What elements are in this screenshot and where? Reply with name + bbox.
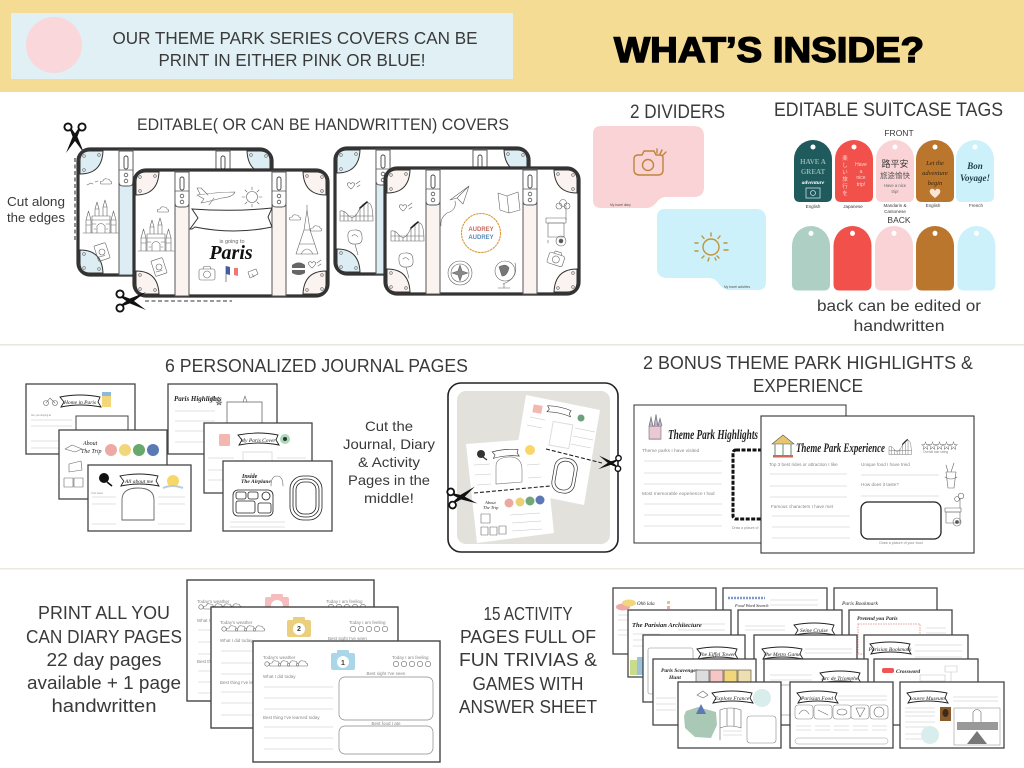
middle cut instruction text: Pages in the (348, 472, 430, 488)
diary page: day 1: What I did today (263, 674, 296, 679)
diary page: day 1: Best sight I've seen (367, 671, 406, 676)
icon: scissors top (64, 123, 86, 153)
title: WHAT’S INSIDE? (614, 31, 924, 70)
journal page: my paris cover: My Paris Cover (239, 438, 276, 444)
illustration: castle (138, 218, 174, 251)
tag language labels: English (926, 203, 941, 208)
tag: japanese: い (842, 169, 848, 176)
divider pink (593, 126, 704, 208)
heading: covers: EDITABLE( OR CAN BE HANDWRITTEN) COVERS (137, 115, 509, 134)
journal page: about the trip (59, 430, 167, 499)
cut instruction text: Cut along (7, 194, 65, 209)
middle cut instruction text: middle! (364, 490, 414, 506)
illustration: globe (495, 261, 516, 288)
journal page: about the trip: The Trip (81, 449, 102, 455)
tags note: handwritten (854, 318, 944, 335)
panel: journal pages (26, 356, 621, 552)
heading: diary: PRINT ALL YOU (38, 603, 170, 623)
tag: japanese: trip! (857, 182, 865, 188)
activity pages row 2: Seine Cruise (800, 628, 829, 634)
illustration: sun (242, 187, 262, 207)
middle cut instruction text: Cut the (365, 418, 413, 434)
tag: chinese: trip! (892, 189, 898, 194)
front cover two (385, 168, 579, 294)
tag: japanese: し (842, 162, 848, 169)
diary page: day 1: Best thing I've learned today (263, 715, 320, 720)
journal page: about the trip: About (82, 441, 98, 447)
activity pages row 4: Crossword (896, 669, 920, 675)
header band (0, 0, 1024, 92)
divider blue (657, 209, 766, 290)
diary page: day 3 (187, 580, 374, 701)
diary page: day 1 (253, 641, 440, 762)
journal page: my paris cover (204, 423, 312, 493)
sheet: front: The Trip (483, 505, 499, 510)
journal page: all about me (88, 465, 191, 531)
journal page: home in paris (26, 384, 135, 454)
divider blue: My travel activities (724, 285, 750, 289)
divider pink: My travel diary (610, 203, 631, 207)
heading: activity: GAMES WITH (472, 674, 584, 694)
cut instruction text (7, 194, 66, 225)
tag backs (792, 226, 996, 290)
diary page: day 2: Best sight I've seen (328, 636, 367, 641)
icon: scissors bottom (116, 290, 146, 312)
logo (462, 214, 500, 252)
activity pages row 2: Pretend you Paris (857, 616, 898, 622)
tag: japanese: Have (855, 162, 867, 168)
panel: diary pages (26, 580, 440, 762)
activity pages row 1: Ohh lala (637, 602, 655, 607)
illustration: drink (945, 463, 957, 488)
illustration: paper plane (441, 186, 469, 226)
heading: diary: handwritten (52, 696, 156, 716)
tag language labels: English (806, 204, 821, 209)
page: theme park highlights (634, 405, 846, 543)
illustration: eiffel tower (296, 205, 318, 254)
icon: day camera (331, 650, 355, 670)
icon: pink colour swatch (26, 17, 82, 73)
callout text (112, 28, 478, 70)
tag: bon voyage: Voyage! (960, 173, 990, 183)
activity page: louvre museum (900, 682, 1004, 748)
cut line on photo left (474, 486, 550, 493)
illustration: macaron (292, 262, 305, 275)
heading: activity: PAGES FULL OF (460, 627, 596, 647)
diary page: day 2: Best thing I've learned today (220, 680, 277, 685)
page: theme park experience: How does it taste? (861, 482, 899, 487)
airplane window (290, 476, 322, 520)
diary page: day 2: Today's weather (220, 620, 253, 625)
diary page: day 3: Best thing (197, 659, 218, 664)
panel: covers (7, 115, 579, 312)
page: theme park experience: Famous characters I have met (771, 504, 834, 509)
activity pages row 2 (628, 610, 952, 677)
tag: let the adventure begin: begin (928, 180, 942, 187)
tag: chinese (876, 140, 914, 202)
tag: chinese: Have a nice (884, 183, 907, 188)
heading: diary (26, 603, 182, 716)
heading: tags: EDITABLE SUITCASE TAGS (774, 100, 1003, 121)
sheet: back (510, 395, 600, 505)
illustration: plane (197, 188, 235, 205)
illustration: cart (546, 200, 570, 246)
illustration: pink castle (649, 414, 662, 439)
activity page: louvre museum: Louvre Museum (908, 696, 945, 702)
diary page: day 3: Today's weather (197, 599, 230, 604)
back cover one (78, 149, 272, 275)
tag: bon voyage: Bon (966, 161, 983, 171)
tag: bon voyage (956, 140, 994, 202)
page: theme park highlights: Most memorable experience I had (642, 491, 715, 497)
page: theme park highlights: Draw a picture of (732, 526, 758, 530)
activity pages row 1: Paris Bookmark (841, 601, 878, 607)
activity pages row 4 (653, 659, 978, 725)
logo: AUDREY (468, 227, 494, 233)
icon: day camera: 1 (341, 660, 345, 667)
diary page: day 3: What I did today (197, 618, 230, 623)
activity pages row 5 (678, 682, 1004, 748)
illustration: carousel (772, 435, 794, 458)
tag: let the adventure begin (916, 140, 954, 202)
label: back: BACK (887, 215, 911, 225)
journal page: home in paris: Are you staying at (31, 414, 51, 417)
sheet: front: About (484, 500, 496, 505)
diary page: day 1: Best food I ate (371, 721, 401, 726)
middle cut instruction text (343, 418, 435, 506)
tag: have a great adventure (794, 140, 832, 202)
middle cut instruction text: & Activity (358, 454, 420, 470)
illustration: food cart (945, 493, 964, 526)
activity pages row 4: Arc de Triomphe (821, 676, 859, 682)
diary page: day 2 (211, 607, 398, 728)
activity page: explore france: Explore France (714, 696, 750, 702)
tag: japanese (835, 140, 873, 202)
page: theme park highlights: Theme Park Highlights (668, 428, 758, 443)
activity pages row 3 (643, 635, 968, 702)
horizontal cut line (145, 300, 232, 302)
sheet: front (466, 438, 554, 543)
heading: bonus: 2 BONUS THEME PARK HIGHLIGHTS & (643, 353, 973, 373)
activity pages row 4: Hunt (668, 675, 681, 681)
diary page: day 1: Today I am feeling (392, 655, 429, 660)
page: theme park experience (761, 416, 974, 553)
scalloped photo frame (733, 450, 773, 519)
tag: japanese: nice (856, 175, 866, 181)
heading: dividers: 2 DIVIDERS (630, 102, 725, 123)
tag: chinese: 路平安 (881, 158, 909, 169)
icon: camera (634, 149, 666, 175)
journal page: paris highlights: Paris Highlights (174, 395, 222, 403)
diary page: day 2: 2 (297, 626, 301, 633)
activity pages row 2: The Parisian Architecture (632, 622, 702, 629)
tag: japanese: を (842, 190, 848, 197)
tag language labels (806, 203, 983, 214)
photo: cutting example (447, 383, 621, 552)
icon: french flag (226, 266, 238, 282)
diary page: day 2: What I did today (220, 638, 253, 643)
activity pages row 3: The Eiffel Tower (699, 651, 736, 658)
heading: journal: 6 PERSONALIZED JOURNAL PAGES (165, 356, 468, 376)
front cover one (134, 170, 328, 296)
heading: activity: FUN TRIVIAS & (459, 650, 597, 670)
star rating: ☆☆☆☆☆ (921, 441, 958, 451)
airplane tray (233, 490, 273, 516)
banner (190, 208, 272, 231)
page: theme park experience: Unique food I have tried (861, 462, 910, 467)
callout text: OUR THEME PARK SERIES COVERS CAN BE (112, 28, 478, 48)
heading: diary: 22 day pages (46, 650, 162, 670)
activity pages row 3: The Metro Game (763, 652, 801, 658)
heading: bonus (643, 353, 973, 396)
tag language labels: Cantonese (884, 209, 906, 214)
journal page: all about me: Your name (91, 492, 104, 495)
journal page: inside the airplane (223, 461, 332, 531)
page: theme park experience: Top 3 best rides or attraction I like (769, 462, 838, 467)
icon: scissors left (447, 485, 478, 509)
heading: diary: available + 1 page (27, 673, 181, 693)
tags note (817, 298, 982, 335)
vertical cut line (74, 158, 76, 240)
illustration: compass (448, 261, 472, 285)
tags note: back can be edited or (817, 298, 982, 315)
tag: chinese: 旅途愉快 (880, 170, 910, 180)
activity page: parisian food (790, 682, 893, 748)
page: theme park experience: Theme Park Experience (796, 440, 885, 455)
label: front: FRONT (884, 128, 914, 138)
panel: dividers (593, 102, 766, 290)
tag: have a great adventure: GREAT (801, 168, 826, 176)
journal page: inside the airplane: Inside (241, 474, 258, 480)
icon: scissors right (598, 454, 621, 472)
cut instruction text: the edges (7, 210, 66, 225)
callout text: PRINT IN EITHER PINK OR BLUE! (158, 50, 426, 70)
tag language labels: French (969, 203, 983, 208)
panel: suitcase tags (774, 100, 1003, 335)
cut line on photo right (546, 449, 602, 463)
tag language labels: Japanese (843, 204, 863, 209)
diary page: day 1: Today's weather (263, 655, 296, 660)
tag: japanese: 楽 (842, 154, 848, 162)
star rating: Overall star rating (923, 450, 948, 454)
page: theme park highlights: Theme parks I have visited (642, 448, 700, 454)
tag: have a great adventure: HAVE A (800, 158, 826, 166)
heading: activity: 15 ACTIVITY (484, 604, 572, 624)
callout: cover colours (11, 13, 513, 79)
activity pages row 3: Parisian Bookmark (868, 647, 912, 653)
illustration: map (498, 192, 520, 213)
tag: japanese: 行 (842, 182, 848, 190)
back cover two (335, 148, 529, 274)
panel: bonus theme park (634, 353, 974, 553)
destination text: is going to (219, 239, 245, 245)
diary page: day 2: Today I am feeling (349, 620, 386, 625)
logo: AUDREY (468, 235, 494, 241)
activity pages row 1: Food Word Search (734, 603, 769, 608)
destination text: Paris (208, 242, 253, 264)
icon: sun (695, 233, 728, 261)
page: theme park experience: Draw a picture of your food (879, 541, 923, 545)
tag: japanese: 旅 (842, 175, 848, 183)
tag: let the adventure begin: Let the (925, 160, 944, 167)
heading: activity: ANSWER SHEET (459, 697, 597, 717)
activity page: explore france (678, 682, 781, 748)
journal page: all about me: All about me (124, 479, 154, 485)
heading: bonus: EXPERIENCE (753, 376, 863, 396)
journal page: inside the airplane: The Airplane (241, 479, 271, 485)
journal page: paris highlights (168, 384, 277, 454)
tag language labels: Mandarin & (883, 203, 907, 208)
panel: activity pages (459, 588, 1004, 748)
diary page: day 3: Today I am feeling (326, 599, 363, 604)
tag: have a great adventure: adventure (802, 180, 825, 186)
tag: japanese: a (860, 169, 863, 175)
tag: let the adventure begin: adventure (922, 170, 948, 177)
activity pages row 4: Paris Scavenger (661, 668, 699, 674)
middle cut instruction text: Journal, Diary (343, 436, 435, 452)
heading: diary: CAN DIARY PAGES (26, 627, 182, 647)
journal page: home in paris: Home in Paris (63, 400, 96, 406)
activity pages row 1 (613, 588, 937, 654)
activity page: parisian food: Parisian Food (800, 696, 833, 702)
heading: activity (459, 604, 597, 717)
